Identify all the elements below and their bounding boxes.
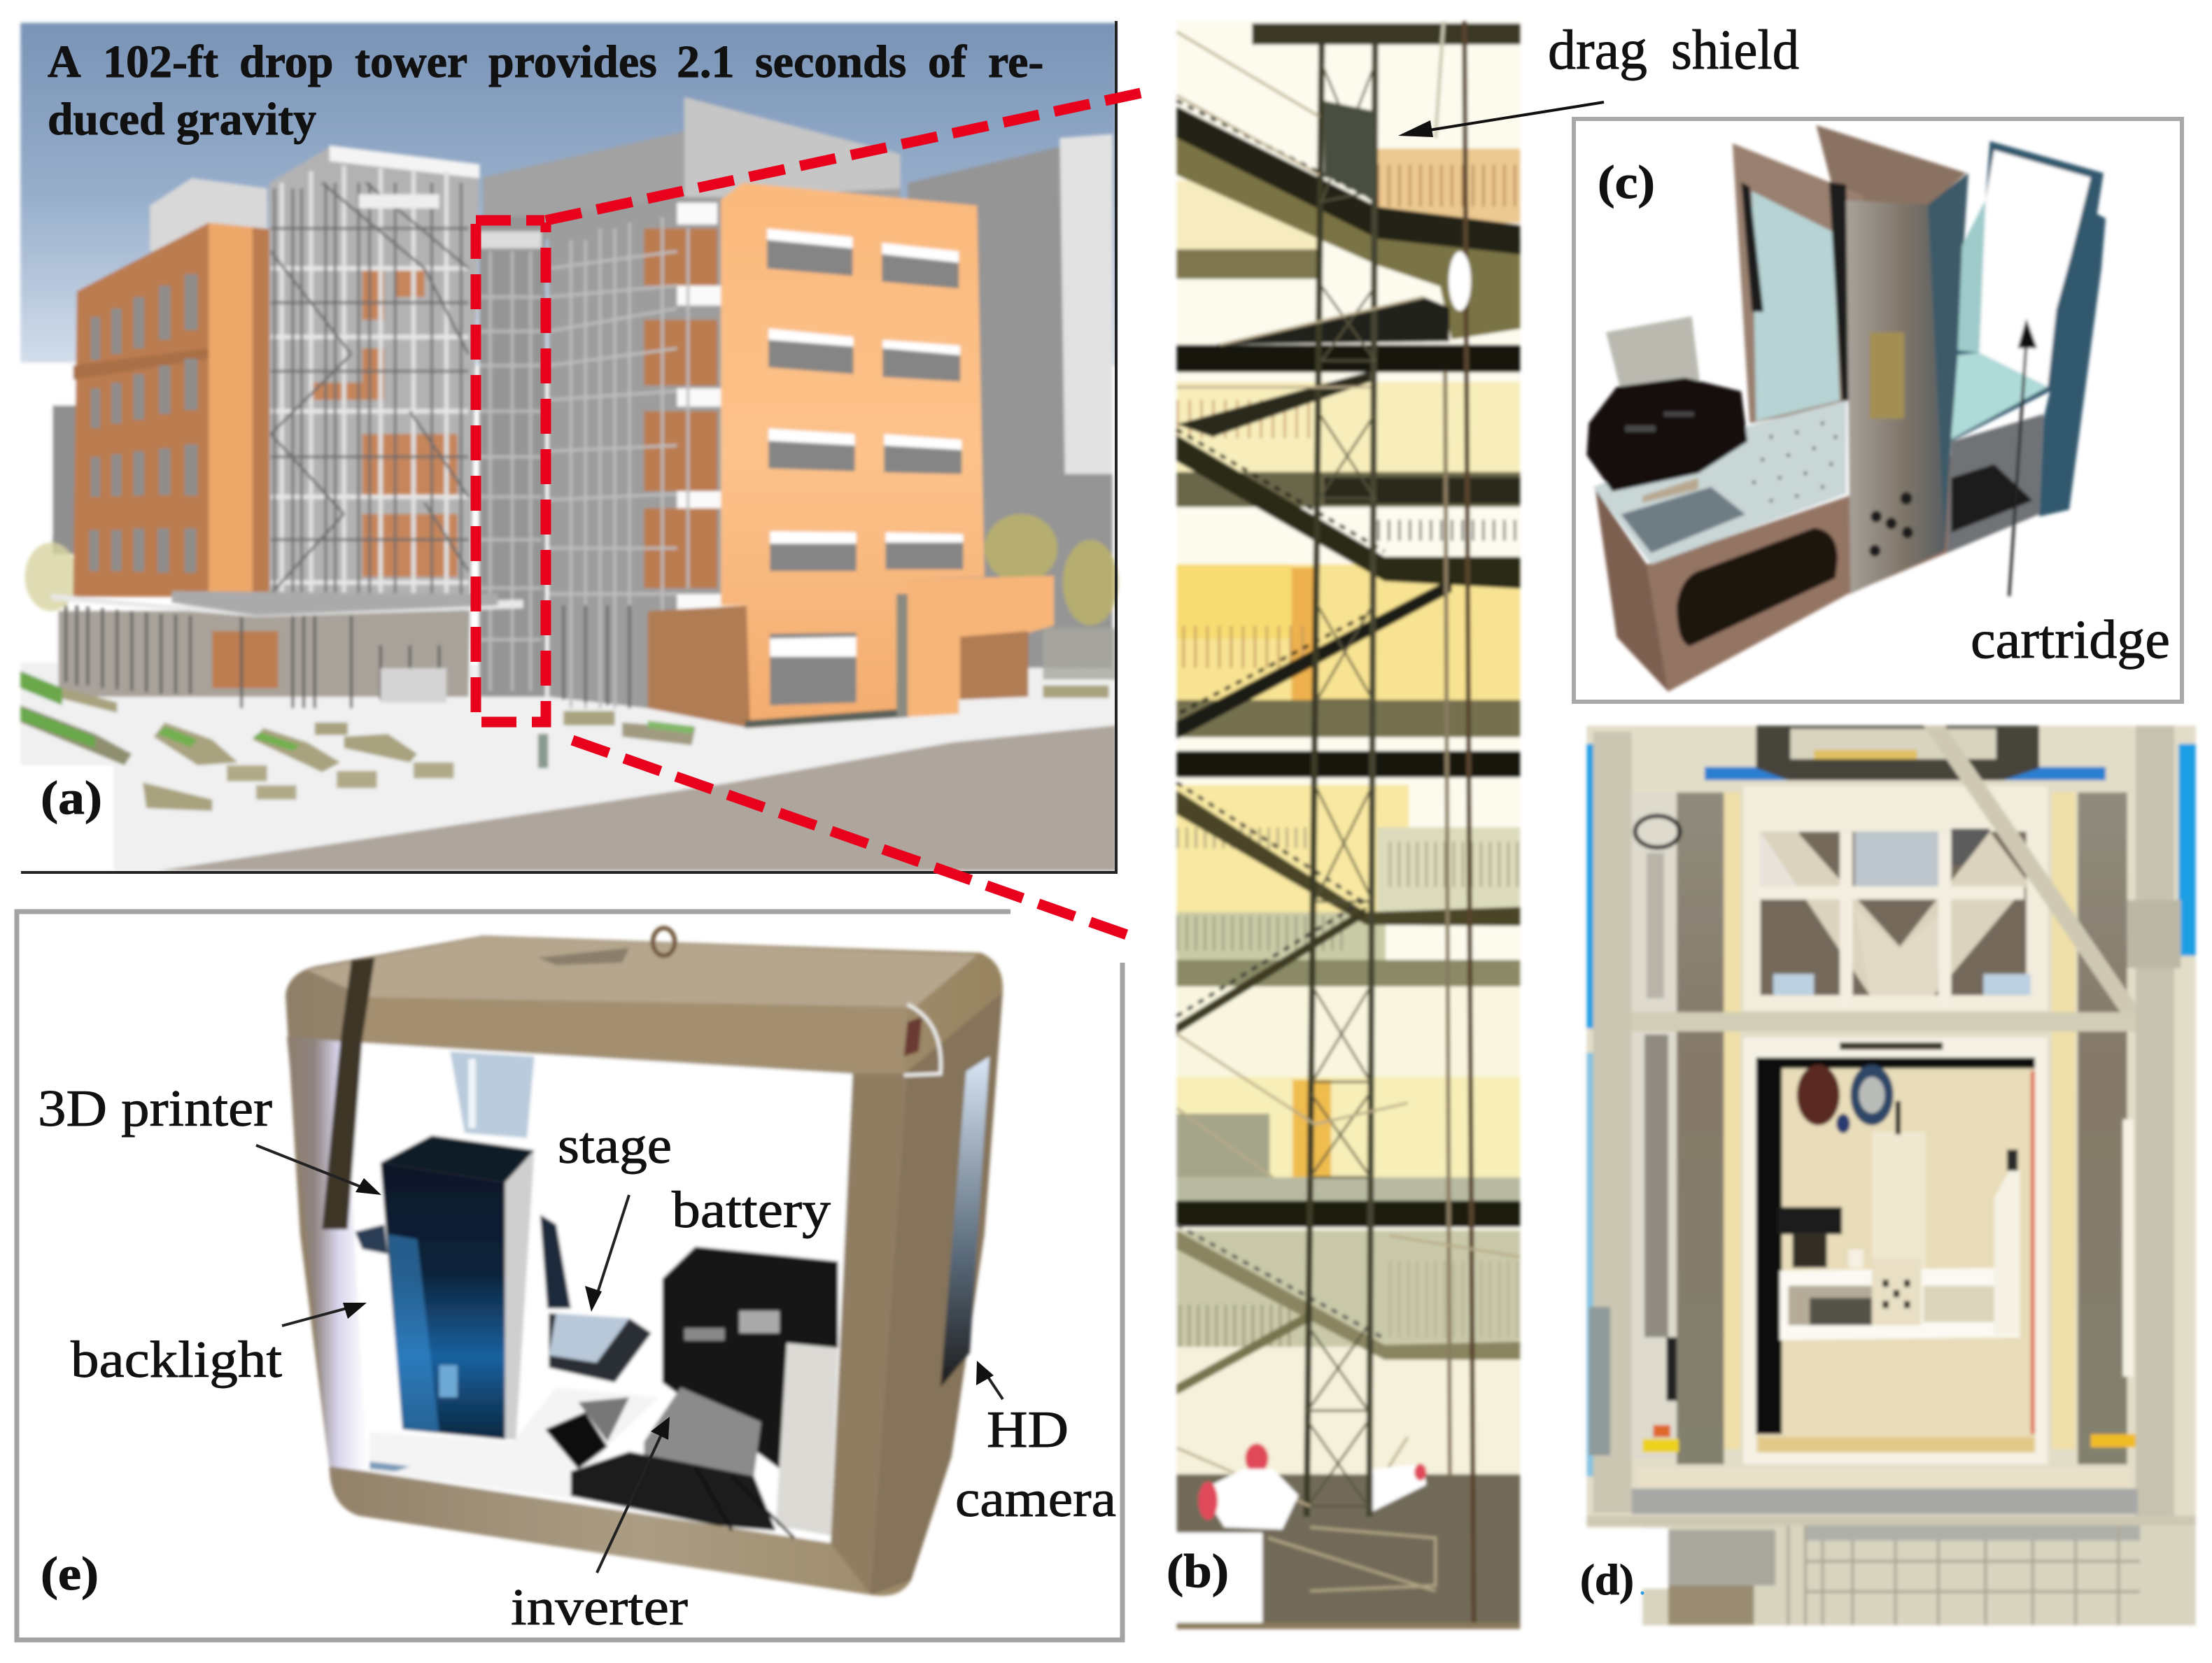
- cartridge arrow: [2009, 318, 2037, 596]
- platform: [1586, 1467, 2196, 1526]
- opening: [344, 1042, 852, 1543]
- title: re-: [988, 36, 1043, 87]
- stair tread teeth: [1177, 101, 1384, 1338]
- central shaft: [479, 217, 545, 697]
- label (e): (e): [41, 1547, 99, 1600]
- upper window: [1743, 786, 2048, 1010]
- pedestrian figure: [538, 734, 548, 768]
- trees: [25, 514, 1118, 679]
- panel (c): cartridge assembly: [1574, 119, 2182, 702]
- title: seconds: [755, 36, 906, 87]
- railing balusters: [1177, 185, 1520, 1326]
- red and white objects at the bottom: [1198, 1443, 1426, 1529]
- round stickers: [1797, 1065, 1894, 1133]
- title: A: [48, 36, 81, 87]
- title second line: duced gravity: [48, 94, 316, 145]
- title: of: [928, 36, 967, 87]
- battery: [663, 1247, 838, 1471]
- blue dot: [1640, 1591, 1644, 1595]
- chamber frame: [1743, 1038, 2048, 1464]
- plaza ground and road: [20, 663, 1116, 871]
- black camera: [1586, 378, 1747, 503]
- arrow: 3D printer: [256, 1145, 381, 1195]
- sky: [20, 23, 1116, 365]
- central pillar: [1846, 173, 1968, 594]
- panel (b): stairwell photo of the drop tower: [1162, 21, 1520, 1629]
- arrow: HD camera: [976, 1361, 1003, 1399]
- arrow: inverter: [597, 1417, 670, 1573]
- panel (c) border: [1574, 119, 2182, 702]
- label (b): (b): [1167, 1544, 1229, 1597]
- capsule outer frame: [286, 935, 1003, 1596]
- tower columns and bracing: [1306, 43, 1375, 1517]
- white label patch (d): [1565, 1528, 1668, 1589]
- crossbar: [1632, 1012, 2136, 1031]
- title: drop: [239, 36, 334, 87]
- metal plate: [776, 1343, 838, 1536]
- inverter: [571, 1387, 794, 1538]
- label: 3D printer: 3D printer: [38, 1080, 272, 1138]
- side wall and window: [871, 992, 1003, 1595]
- arrow: stage: [585, 1195, 629, 1312]
- lower railing: [1642, 1526, 2196, 1625]
- panel (a): building rendering of the drop tower: [20, 21, 1118, 872]
- coil of cable: [1635, 816, 1679, 847]
- label: drag shield with arrow: shield: [1671, 20, 1799, 81]
- yellow rails: [1724, 793, 2076, 1449]
- cartridge column: [1872, 1101, 1926, 1325]
- walls: [1177, 21, 1520, 1628]
- 3D printer: [355, 1135, 571, 1439]
- label: drag shield with arrow: drag: [1548, 20, 1647, 81]
- dashed line to top of panel b: [546, 93, 1141, 220]
- stage: [549, 1313, 651, 1382]
- left brick wing: [73, 222, 274, 597]
- corner bracket: [904, 1005, 941, 1075]
- title: provides: [488, 36, 657, 87]
- label: backlight: backlight: [71, 1331, 282, 1389]
- base box: [1595, 455, 1951, 692]
- railings: [1177, 31, 1520, 1591]
- title: 2.1: [677, 36, 735, 87]
- staircases: [1177, 106, 1520, 1395]
- label (a): (a): [41, 771, 102, 824]
- panel (a) frame edges: [21, 21, 1116, 872]
- optical table top: [1593, 400, 1846, 565]
- label: HD: HD: [987, 1401, 1069, 1459]
- label: cartridge: cartridge: [1971, 609, 2170, 670]
- title: 102-ft: [103, 36, 218, 87]
- light glare: [1449, 251, 1471, 311]
- label (c): (c): [1598, 155, 1655, 208]
- planters on plaza: [20, 671, 1109, 811]
- yellow and orange buttons: [1588, 1119, 2136, 1455]
- strap: [322, 958, 375, 1229]
- left window frame: [1733, 143, 1864, 423]
- label: drag shield with arrow: [1398, 20, 1799, 137]
- backlight glow and left post: [287, 1037, 366, 1471]
- top frame: [1756, 726, 2039, 780]
- support column behind printer: [450, 1052, 535, 1138]
- label: stage: stage: [558, 1117, 672, 1175]
- red dashed zoom-in connector: [476, 93, 1141, 935]
- vertical poles: [1435, 21, 1474, 1622]
- glass tower: [269, 146, 479, 691]
- side columns: [1593, 726, 2181, 1519]
- panel (e): drop capsule with 3D printer: [17, 912, 1122, 1640]
- floor beams: [1177, 23, 1520, 1227]
- white label patch (a): [20, 765, 113, 871]
- label: battery: battery: [672, 1182, 831, 1239]
- background: [1586, 726, 2196, 1625]
- label: camera: camera: [955, 1471, 1116, 1528]
- background buildings: [150, 97, 1113, 702]
- cartridge frame: [1947, 141, 2106, 553]
- blue accents: [1586, 744, 2196, 1476]
- camera plate: [1606, 316, 1700, 391]
- eye bolt: [653, 928, 675, 956]
- back plate: [1816, 125, 1966, 223]
- camera and white base: [1777, 1149, 2020, 1340]
- dashed line to bottom of panel b: [572, 740, 1127, 935]
- orange main building: [721, 183, 1054, 728]
- drag shield: [1324, 101, 1375, 201]
- label (d): (d): [1580, 1557, 1634, 1604]
- label: inverter: inverter: [511, 1579, 688, 1636]
- grey panels: [1677, 793, 2127, 1464]
- diagonal brace: [1924, 726, 2136, 1035]
- right glass wing: [549, 197, 750, 728]
- panel (d): capsule mounted in the drop tower: [1565, 726, 2196, 1628]
- mount: [369, 1387, 658, 1499]
- panel (e) border: [17, 912, 1122, 1640]
- arrows in panel (e): [256, 1145, 1003, 1573]
- white label patch (b): [1162, 1533, 1262, 1622]
- canopy and ground floor: [51, 591, 523, 708]
- dashed box around the tower: [476, 220, 546, 722]
- title: tower: [355, 36, 467, 87]
- arrow: backlight: [282, 1303, 367, 1326]
